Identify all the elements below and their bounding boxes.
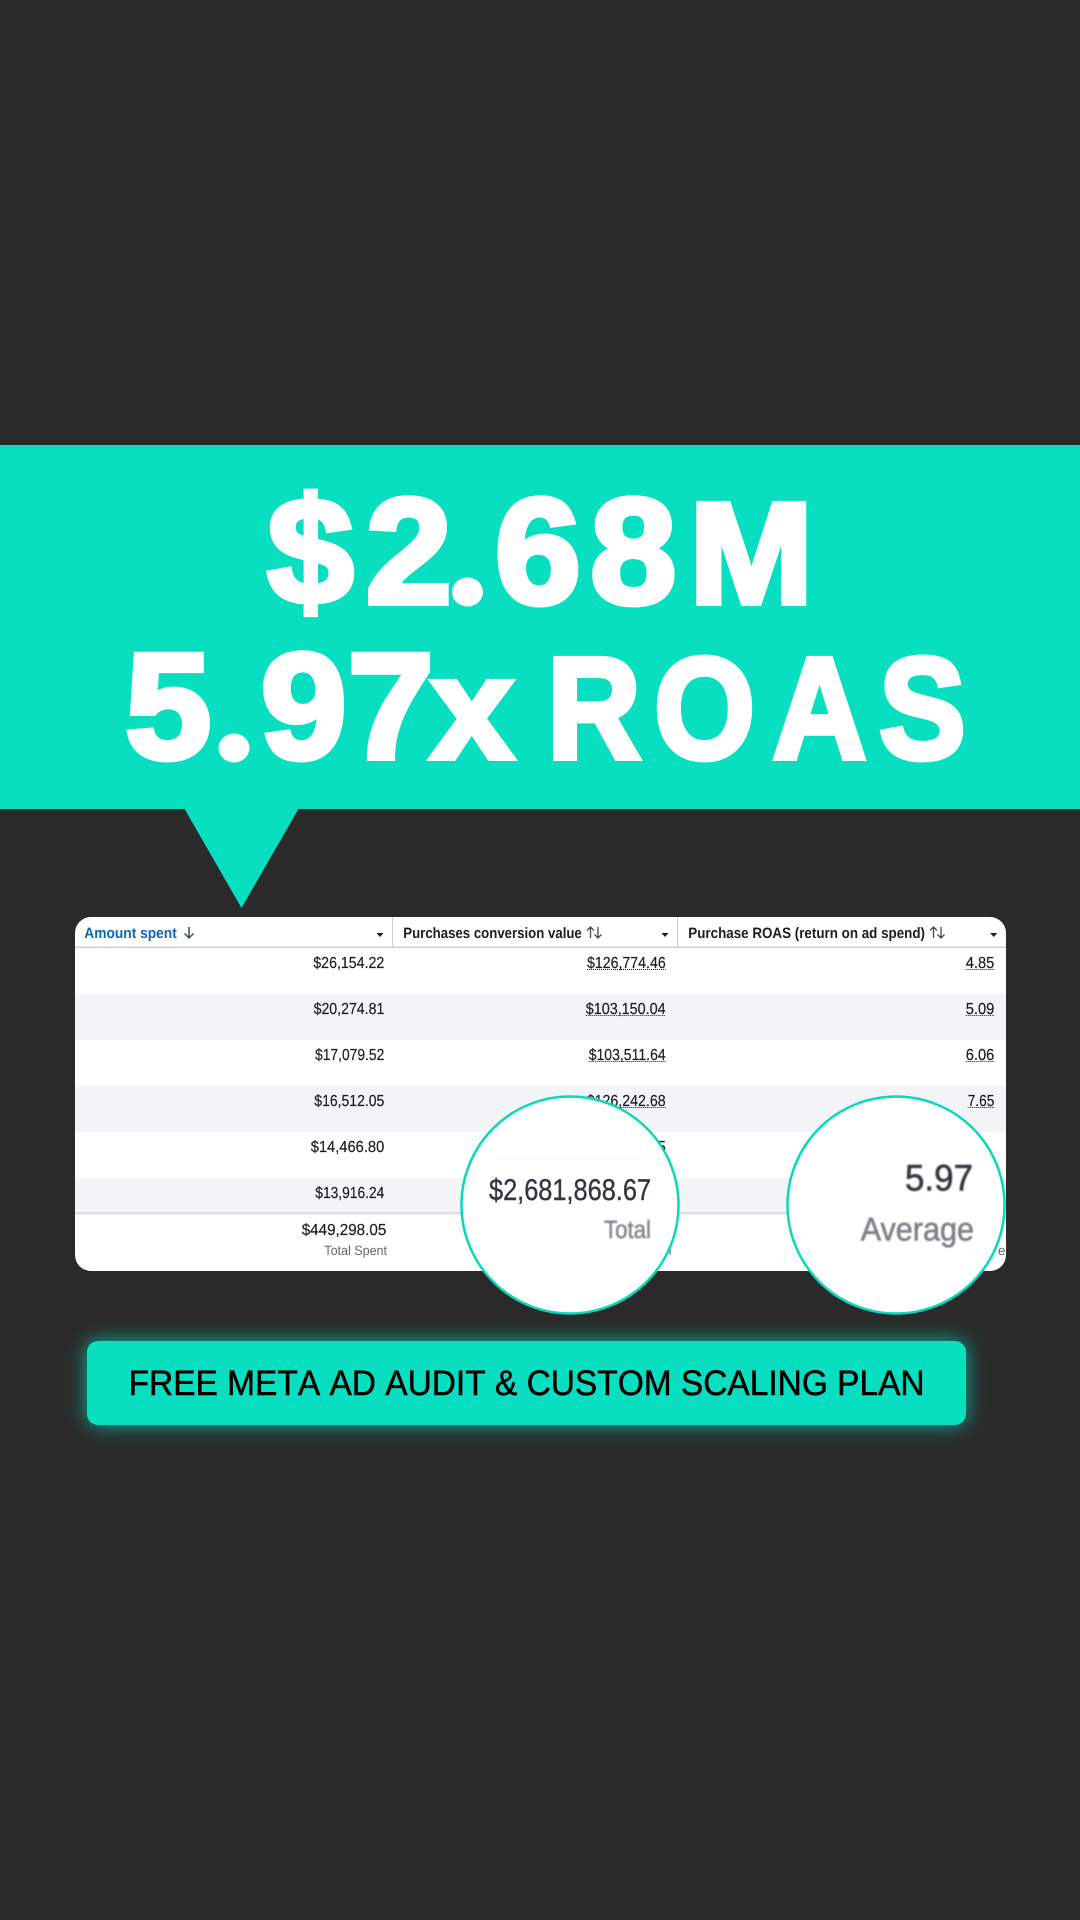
icon: sort arrows 2 — [930, 927, 944, 938]
faint rule in lens — [495, 1159, 663, 1160]
total value: $2,681,868.67 — [489, 1174, 651, 1207]
button label: FREE META AD AUDIT & CUSTOM SCALING PLAN — [129, 1363, 925, 1403]
circle lens 1 — [462, 1096, 678, 1314]
footer label fragments: l — [668, 1243, 672, 1258]
column: roas values: 7.65 — [968, 1093, 994, 1110]
column: amount spent values: $20,274.81 — [314, 1001, 384, 1018]
header: purchases conversion value: Purchases conversion value — [403, 925, 582, 942]
column: conversion value: $126,242.68 — [587, 1093, 666, 1110]
column: amount spent values: $449,298.05 — [302, 1222, 386, 1239]
title line 2: value: x — [431, 628, 513, 789]
average label: Average — [861, 1210, 974, 1248]
title line 1: M — [689, 473, 813, 634]
header: purchase roas: Purchase ROAS (return on ad spend) — [688, 925, 925, 942]
footer label fragments: e — [998, 1243, 1006, 1258]
column: roas values — [966, 955, 994, 1110]
column: amount spent values: $16,512.05 — [314, 1093, 384, 1110]
column: conversion value: $103,511.64 — [589, 1047, 666, 1064]
banner pointer triangle — [184, 808, 299, 908]
table background — [75, 917, 1006, 1271]
icon: dropdown caret 1 — [376, 933, 384, 937]
column: conversion value: 5 — [657, 1139, 666, 1156]
icon: dropdown caret 3 — [990, 933, 997, 937]
average value: 5.97 — [905, 1158, 973, 1198]
column: conversion value — [586, 955, 666, 1156]
total label: Total — [604, 1216, 651, 1244]
column: conversion value: $103,150.04 — [586, 1001, 666, 1018]
column: roas values: 6.06 — [966, 1047, 994, 1064]
callout: average magnifier circle — [788, 1096, 1004, 1314]
column: amount spent values — [302, 955, 386, 1239]
title line 2: value: 97 — [261, 622, 434, 790]
panel: headline banner with pointer — [0, 445, 1080, 908]
column: roas values: 5.09 — [966, 1001, 994, 1018]
title — [125, 467, 966, 790]
table rules — [75, 917, 1006, 1214]
title line 1: $2 — [267, 467, 452, 635]
column: amount spent values: $26,154.22 — [313, 955, 384, 972]
title line 2: value: 5 — [125, 622, 211, 790]
callout: total magnifier circle — [462, 1096, 678, 1314]
column: amount spent values: $14,466.80 — [311, 1139, 384, 1156]
column: roas values: 4.85 — [966, 955, 994, 972]
column: amount spent values: $13,916.24 — [315, 1185, 384, 1202]
column: conversion value: $126,774.46 — [587, 955, 666, 972]
icon: sort down arrow — [184, 927, 194, 938]
title line 2: value: . — [218, 659, 249, 782]
title line 2: roas: ROAS — [547, 628, 966, 789]
icon: dropdown caret 2 — [662, 933, 668, 937]
call to action button — [87, 1341, 966, 1425]
button body — [87, 1341, 966, 1425]
dotted underlines — [586, 970, 994, 1108]
title line 1: 68 — [495, 467, 676, 635]
panel: ads results table — [75, 917, 1006, 1271]
icon: sort arrows 1 — [587, 927, 602, 938]
header: amount spent: Amount spent — [84, 925, 177, 942]
banner band — [0, 445, 1080, 809]
button glow — [87, 1341, 966, 1425]
rounded decimal points — [452, 578, 483, 606]
table zebra rows — [75, 994, 1006, 1213]
circle lens 2 — [788, 1096, 1004, 1314]
table header — [84, 925, 997, 942]
label: total spent: Total Spent — [324, 1243, 387, 1258]
column: amount spent values: $17,079.52 — [315, 1047, 384, 1064]
footer label fragments — [669, 1248, 1005, 1256]
title line 1: . — [451, 504, 483, 627]
